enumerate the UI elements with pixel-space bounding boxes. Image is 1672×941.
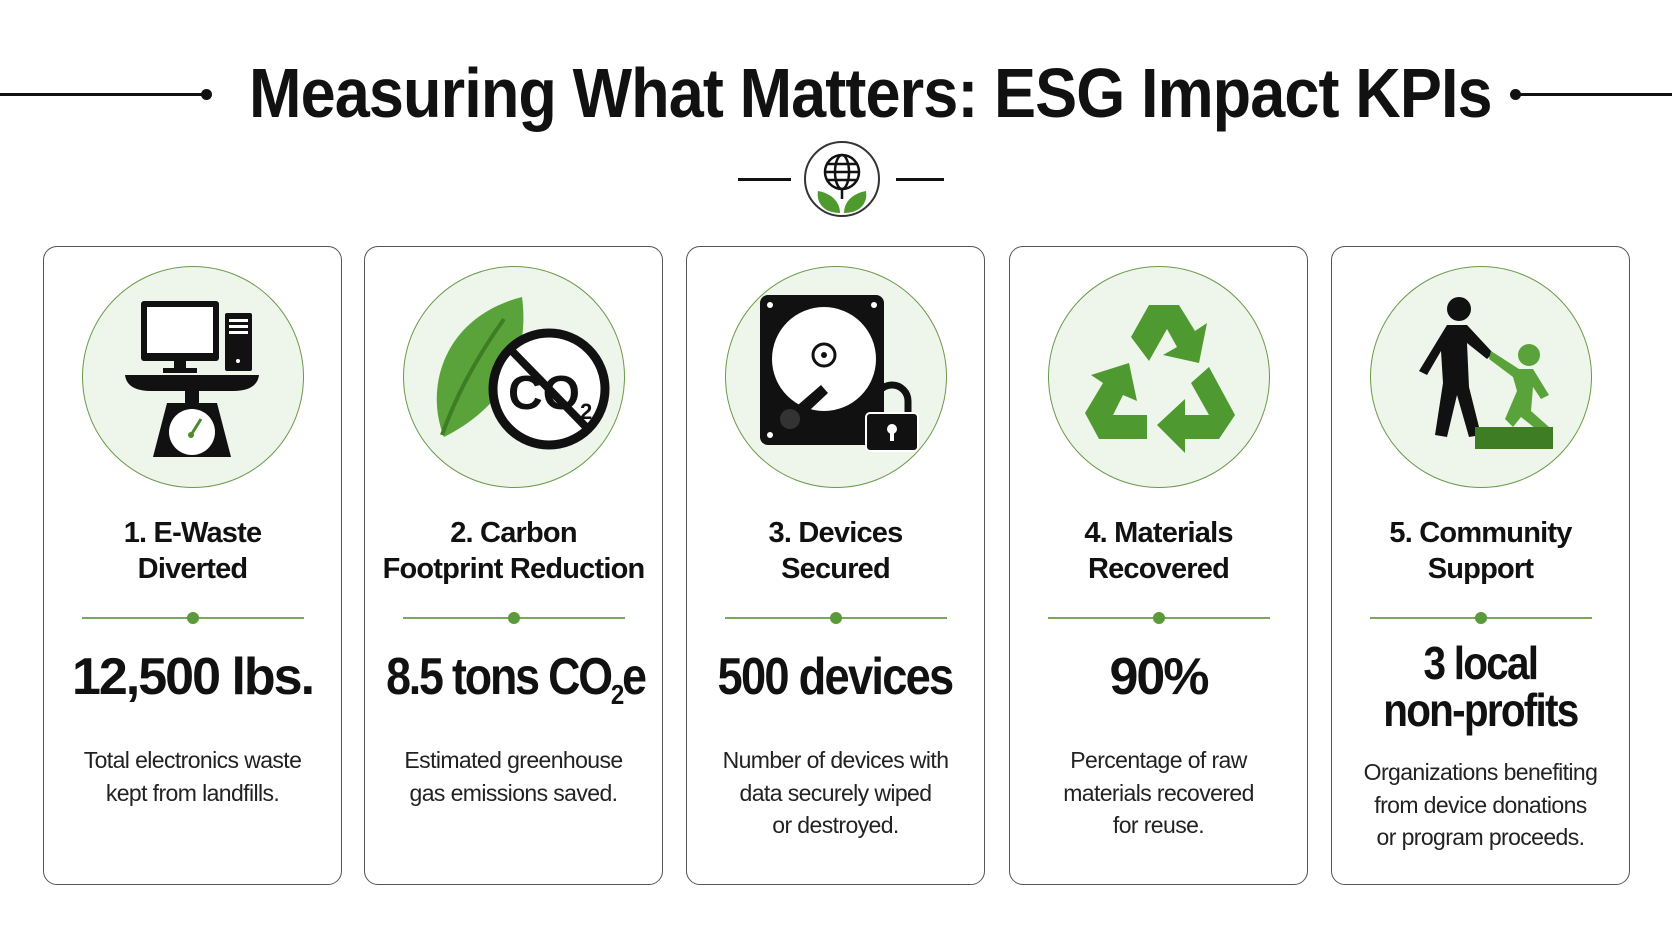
- heading: [383, 517, 644, 585]
- value: 3 local: [1424, 637, 1537, 689]
- description: for reuse.: [1113, 812, 1204, 838]
- heading: 5. Community: [1389, 517, 1572, 549]
- heading: [1389, 517, 1572, 585]
- description: Organizations benefiting: [1364, 759, 1597, 785]
- heading: 3. Devices: [769, 517, 902, 549]
- heading: [1084, 517, 1233, 585]
- title rule left: [0, 93, 208, 96]
- value: 90%: [1109, 648, 1208, 706]
- heading: 4. Materials: [1084, 517, 1233, 549]
- value: 8.5 tons COe: [386, 648, 645, 706]
- heading: Secured: [781, 553, 890, 585]
- panel: carbon: [364, 246, 663, 885]
- value: [1383, 637, 1578, 736]
- heading: Footprint Reduction: [383, 553, 644, 585]
- description: gas emissions saved.: [410, 780, 617, 806]
- description: data securely wiped: [740, 780, 931, 806]
- icon: computer on scale: [82, 266, 304, 488]
- panel: materials: [1009, 246, 1308, 885]
- description: materials recovered: [1063, 780, 1254, 806]
- description: Number of devices with: [723, 747, 948, 773]
- heading: Recovered: [1088, 553, 1229, 585]
- panel: devices secured: [686, 246, 985, 885]
- value: 2: [611, 679, 622, 710]
- description: [404, 747, 623, 806]
- icon: leaf and no CO2: [403, 266, 625, 488]
- icon: leaf and no CO2: CO: [508, 367, 580, 420]
- heading: [769, 517, 902, 585]
- icon: hard drive with lock: [725, 266, 947, 488]
- description: or destroyed.: [772, 812, 899, 838]
- icon: globe with leaves: [738, 141, 944, 217]
- icon: helping hand: [1370, 266, 1592, 488]
- description: Total electronics waste: [84, 747, 301, 773]
- description: [1364, 759, 1597, 850]
- heading: 1. E-Waste: [124, 517, 261, 549]
- title rule right: [1514, 93, 1672, 96]
- title: Measuring What Matters: ESG Impact KPIs: [249, 54, 1492, 132]
- icon: leaf and no CO2: 2: [580, 399, 592, 424]
- description: [723, 747, 948, 838]
- description: kept from landfills.: [106, 780, 279, 806]
- heading: Diverted: [138, 553, 247, 585]
- description: [1063, 747, 1254, 838]
- panel: e-waste: [43, 246, 342, 885]
- description: or program proceeds.: [1377, 824, 1584, 850]
- icon: recycle: [1048, 266, 1270, 488]
- value: non-profits: [1383, 684, 1578, 736]
- heading: [124, 517, 262, 585]
- value: 500 devices: [718, 648, 953, 706]
- value: 12,500 lbs.: [72, 648, 313, 706]
- heading: 2. Carbon: [450, 517, 577, 549]
- description: [84, 747, 301, 806]
- description: from device donations: [1374, 792, 1587, 818]
- heading: Support: [1428, 553, 1533, 585]
- description: Percentage of raw: [1070, 747, 1247, 773]
- panel: community: [1331, 246, 1630, 885]
- description: Estimated greenhouse: [404, 747, 623, 773]
